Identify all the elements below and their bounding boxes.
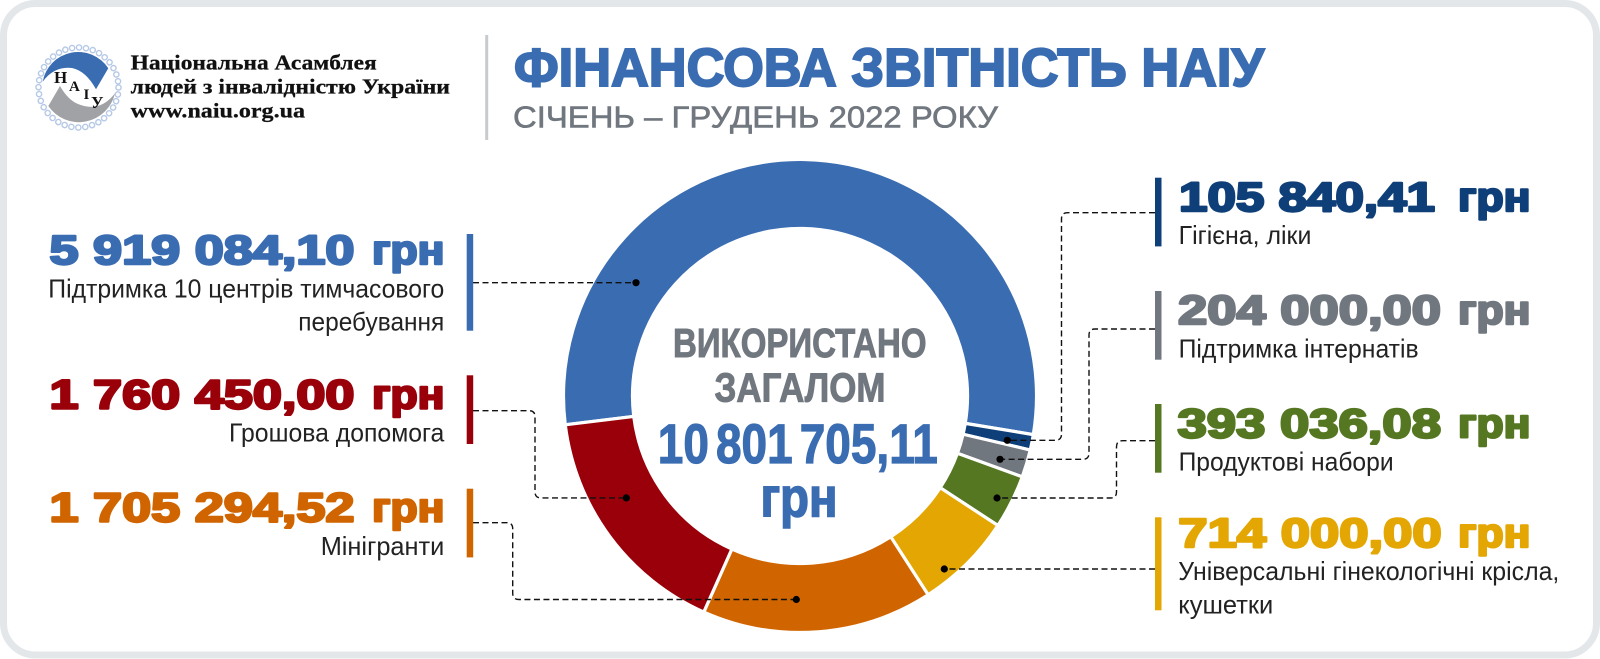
callout: gynecological chairs: кушетки bbox=[1178, 589, 1273, 619]
callout: gynecological chairs bbox=[1155, 510, 1559, 619]
centre total: ВИКОРИСТАНО bbox=[673, 320, 926, 366]
callout: financial aid: Грошова допомога bbox=[229, 418, 445, 448]
centre total: грн bbox=[760, 465, 838, 528]
organisation name: Національна Асамблея bbox=[131, 50, 377, 74]
segment: food kits bbox=[940, 453, 1022, 526]
callout: minigrants: 1 705 294,52 bbox=[50, 485, 354, 531]
callout: food kits: 393 036,08 bbox=[1178, 400, 1441, 446]
leader: chairs bbox=[941, 565, 1155, 573]
callout: support of 10 centres: грн bbox=[372, 227, 444, 273]
callout: support of 10 centres: перебування bbox=[298, 307, 444, 337]
callout: boarding schools: 204 000,00 bbox=[1178, 287, 1441, 333]
header: organisation logo and name bbox=[38, 48, 450, 128]
callout: minigrants: Мінігранти bbox=[321, 531, 444, 561]
leader: minigrants bbox=[473, 523, 800, 603]
callout: food kits: грн bbox=[1458, 400, 1530, 446]
leader lines and dots bbox=[473, 213, 1155, 603]
callout: financial aid: 1 760 450,00 bbox=[50, 371, 354, 417]
callout: support of 10 centres: 5 919 084,10 bbox=[50, 227, 354, 273]
callout: boarding schools bbox=[1155, 287, 1530, 363]
segment: gynecological chairs bbox=[891, 488, 998, 595]
centre total: ЗАГАЛОМ bbox=[714, 364, 886, 410]
segment: hygiene, medicine bbox=[963, 423, 1033, 450]
leader: food kits bbox=[993, 441, 1155, 502]
callout: boarding schools: Підтримка інтернатів bbox=[1179, 333, 1419, 363]
icon: NAIU logo: У bbox=[91, 93, 104, 112]
callout: financial aid bbox=[50, 371, 473, 448]
segment: minigrants bbox=[704, 537, 928, 633]
callout: support of 10 centres: Підтримка 10 центрів тимчасового bbox=[48, 273, 444, 303]
organisation name: www.naiu.org.ua bbox=[131, 98, 305, 122]
callout: food kits: Продуктові набори bbox=[1179, 447, 1394, 477]
segment: support of 10 centres bbox=[564, 159, 1037, 435]
callout: support of 10 centres bbox=[48, 227, 473, 337]
callout: gynecological chairs: грн bbox=[1458, 510, 1530, 556]
centre total: 10 801 705,11 bbox=[658, 412, 938, 475]
callout: gynecological chairs: 714 000,00 bbox=[1178, 510, 1442, 556]
segment: boarding schools bbox=[957, 434, 1030, 477]
leader: hygiene bbox=[1004, 213, 1155, 444]
callout: boarding schools: грн bbox=[1458, 287, 1530, 333]
callout: hygiene, medicine: Гігієна, ліки bbox=[1179, 220, 1311, 250]
callout: minigrants bbox=[50, 485, 473, 561]
title: ФІНАНСОВА ЗВІТНІСТЬ НАІУ bbox=[514, 38, 1265, 98]
icon: NAIU logo bbox=[38, 48, 118, 128]
icon: NAIU logo: І bbox=[84, 87, 90, 103]
leader: financial aid bbox=[473, 411, 630, 502]
icon: NAIU logo: Н bbox=[54, 68, 67, 87]
centre total bbox=[658, 320, 938, 528]
callout: financial aid: грн bbox=[372, 371, 444, 417]
callout: food kits bbox=[1155, 400, 1530, 477]
donut chart bbox=[564, 159, 1037, 633]
callout: minigrants: грн bbox=[372, 485, 444, 531]
leader: boarding schools bbox=[996, 329, 1155, 463]
callout: gynecological chairs: Універсальні гінекологічні крісла, bbox=[1178, 556, 1559, 586]
icon: NAIU logo: А bbox=[69, 79, 80, 95]
leader: centres bbox=[473, 279, 640, 286]
subtitle: СІЧЕНЬ – ГРУДЕНЬ 2022 РОКУ bbox=[513, 99, 998, 134]
callout: hygiene, medicine: грн bbox=[1458, 174, 1530, 220]
organisation name: людей з інвалідністю України bbox=[131, 74, 450, 98]
organisation name bbox=[131, 50, 450, 122]
segment: financial aid bbox=[565, 416, 732, 612]
callout: hygiene, medicine bbox=[1155, 174, 1530, 250]
callout: hygiene, medicine: 105 840,41 bbox=[1179, 174, 1435, 220]
